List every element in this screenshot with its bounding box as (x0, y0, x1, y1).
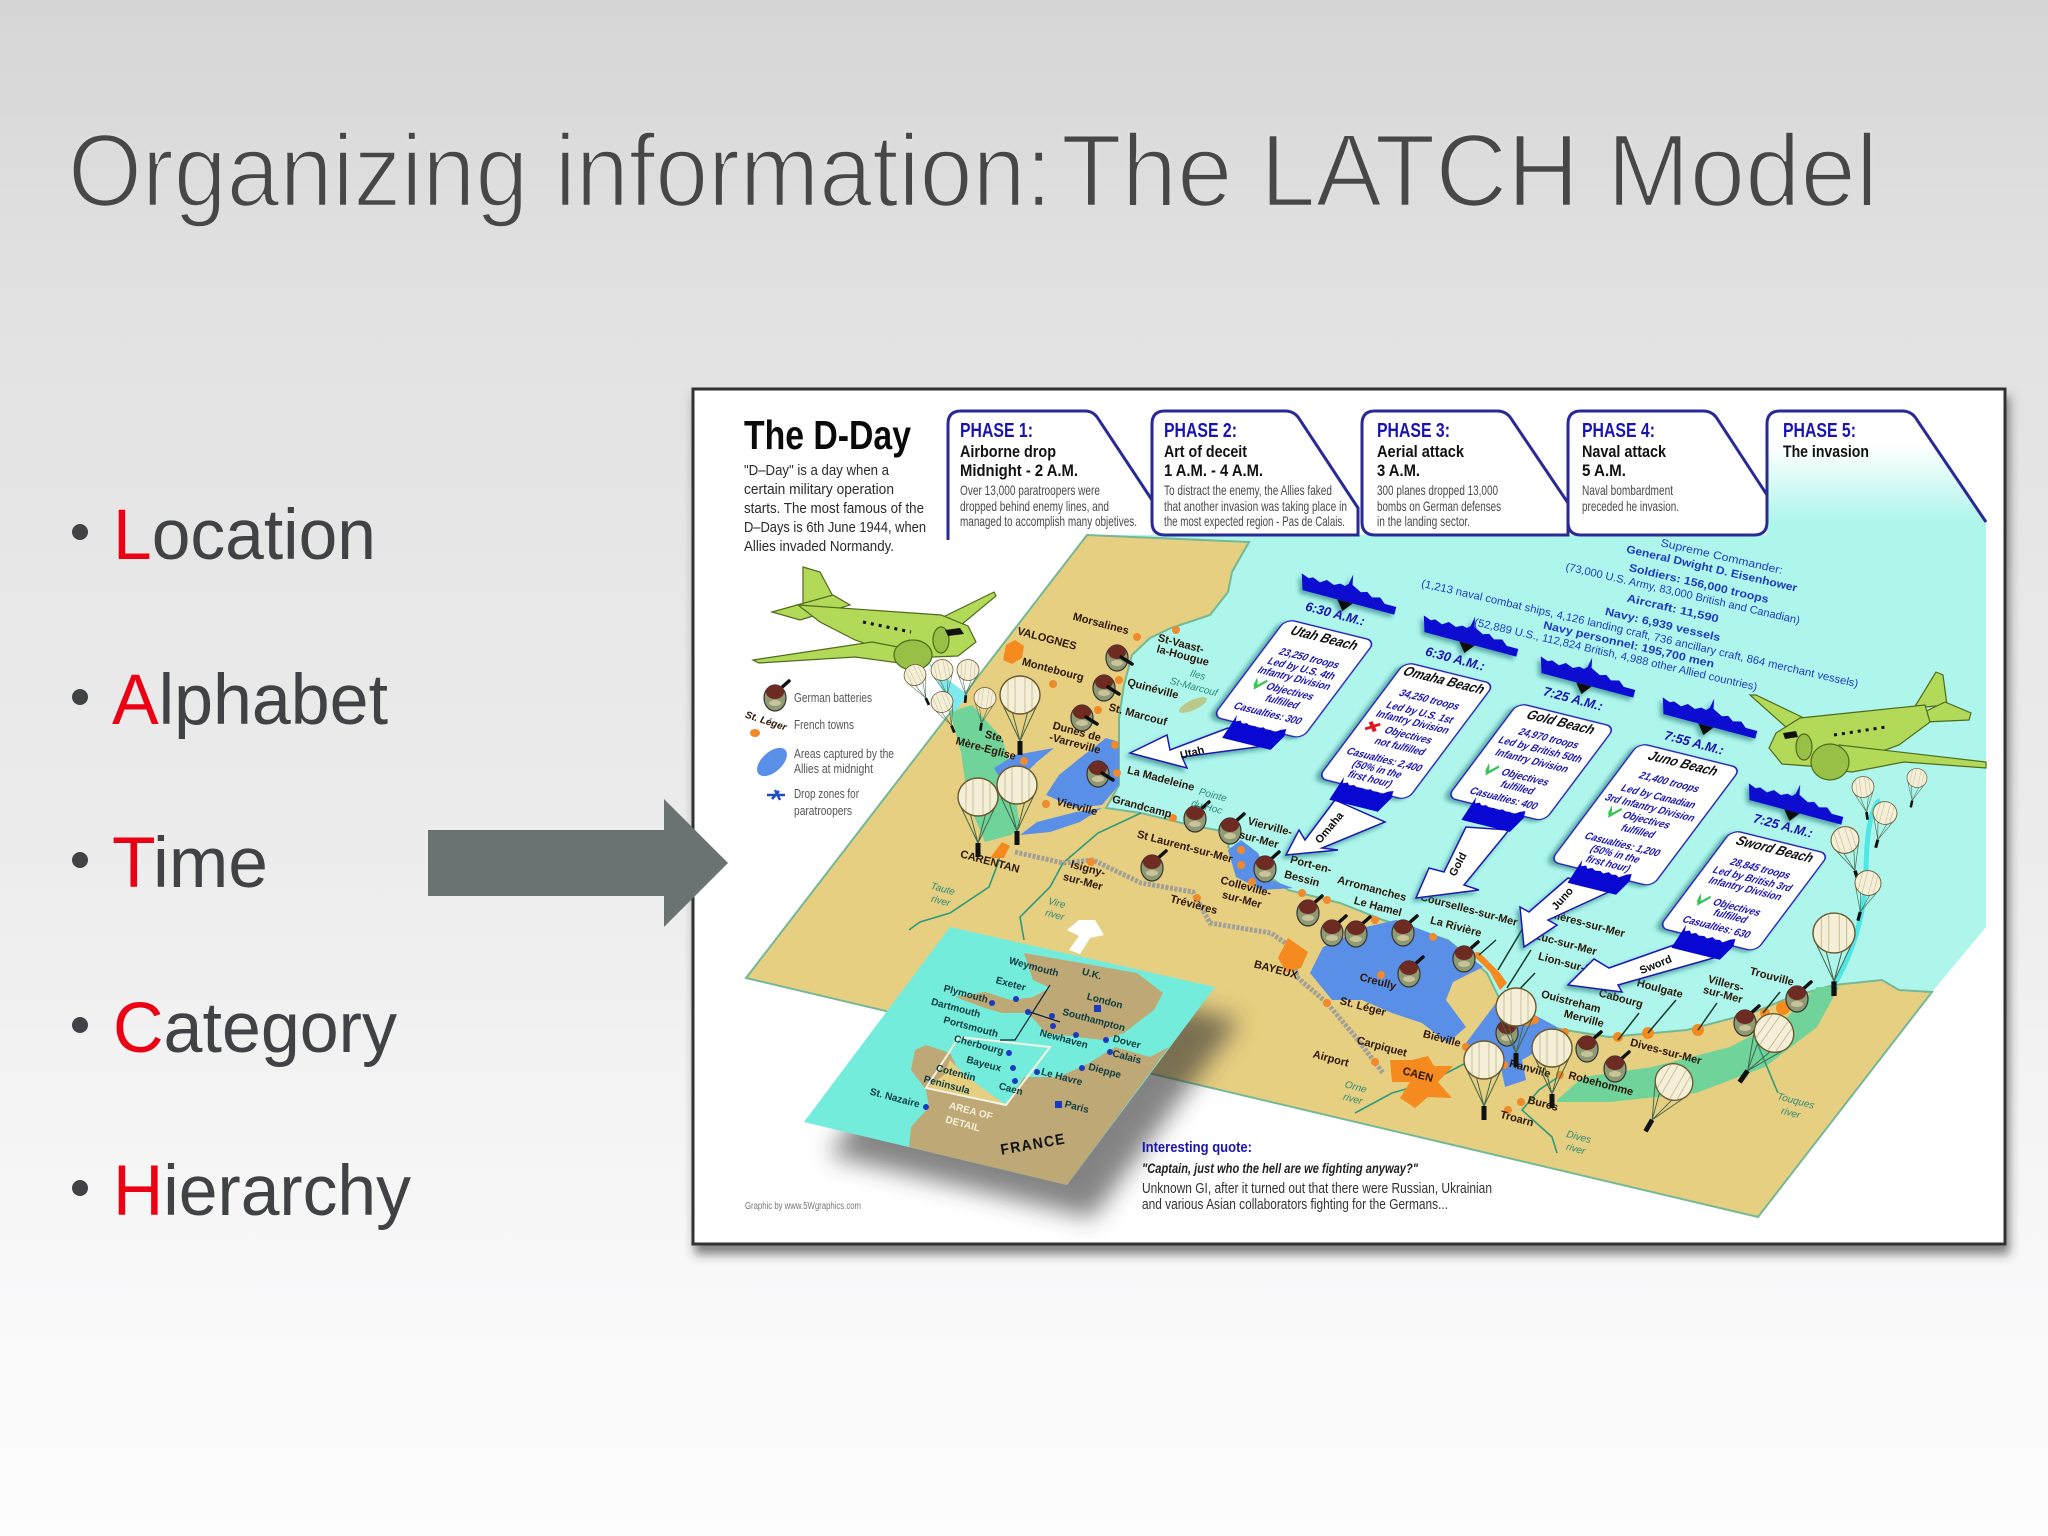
arrow: Sword (1568, 945, 1717, 992)
bullet: Time: Time (112, 824, 268, 903)
bullet: Location: Location (113, 496, 376, 575)
bullet: Hierarchy: Hierarchy (113, 1152, 411, 1231)
map: town labels: Isigny- (1069, 859, 1107, 880)
card: Omaha Beach: 34,250 troops (1396, 687, 1463, 713)
quote block: Interesting quote: (1142, 1139, 1252, 1156)
inset labels: Southampton (1061, 1007, 1126, 1034)
phase tab 1: dropped behind enemy lines, and (960, 498, 1109, 514)
landing time labels: 6:30 A.M.: (1424, 644, 1487, 674)
arrow: Utah: Utah (1179, 744, 1206, 762)
title (68, 113, 1878, 228)
inset UK land (955, 953, 1163, 1040)
map: town markers (1020, 626, 1569, 1114)
phase tab 1 (948, 411, 1152, 540)
title: The LATCH Model (1061, 113, 1878, 228)
map: sea (746, 411, 1986, 1217)
phase tab 1: PHASE 1: (960, 420, 1033, 442)
intro text (744, 462, 926, 555)
legend: drop zones: Drop zones for (794, 786, 860, 801)
bullet list: LATCH (72, 496, 411, 1231)
phase tab 3: 300 planes dropped 13,000 (1377, 482, 1498, 498)
card: Sword Beach (1648, 830, 1829, 966)
forces summary text: Aircraft: 11,590 (1626, 593, 1720, 625)
map: town labels: Creully (1358, 971, 1398, 993)
map: German batteries (1071, 645, 1811, 1082)
map: town labels: Bessin (1283, 869, 1321, 890)
card: Utah Beach: 23,250 troops (1276, 646, 1343, 671)
icon: transport plane right (1750, 672, 1986, 780)
map: town labels: -Varreville (1048, 732, 1102, 757)
inset labels: London (1086, 992, 1124, 1012)
phase tab 5 (1767, 411, 1986, 522)
map: town labels: Merville (1562, 1008, 1605, 1030)
inset France land (909, 1045, 1169, 1185)
map: town labels: Montebourg (1021, 656, 1085, 684)
map: town labels: Trévières (1169, 893, 1219, 917)
inset labels: Portsmouth (942, 1015, 999, 1040)
map: rivers (909, 813, 1778, 1153)
legend: captured areas: Areas captured by the (794, 746, 894, 761)
card: Omaha Beach: Casualties: 2,400 (1343, 746, 1426, 774)
inset area of detail (926, 1037, 1050, 1105)
inset labels: AREA OF (948, 1100, 994, 1123)
warships (1295, 562, 1848, 834)
inset labels: U.K. (1081, 967, 1103, 983)
card: Utah Beach: Objectives (1263, 681, 1317, 703)
map: town labels: Villers- (1707, 974, 1745, 995)
map: river and sea labels: Vire (1047, 896, 1067, 911)
phase tab 3: PHASE 3: (1377, 420, 1450, 442)
inset labels: Dover (1112, 1034, 1142, 1052)
phase tab 3: in the landing sector. (1377, 513, 1470, 529)
card: Juno Beach: Led by Canadian (1618, 783, 1699, 811)
map: town labels: Cabourg (1597, 987, 1644, 1011)
phase tab 3: Aerial attack (1377, 442, 1464, 461)
card: Omaha Beach: (50% in the (1349, 758, 1405, 781)
card: Gold Beach: Objectives (1498, 767, 1552, 789)
map: town labels: sur-Mer (1062, 871, 1105, 893)
card: Omaha Beach: not fulfilled (1371, 735, 1429, 758)
phase tab 3: bombs on German defenses (1377, 498, 1501, 514)
map: town labels: St. Marcouf (1107, 702, 1169, 729)
inset labels: DETAIL (944, 1115, 981, 1134)
map: town labels: Ranville (1508, 1058, 1552, 1080)
card: Sword Beach: Sword Beach (1732, 833, 1818, 865)
inset labels: FRANCE (999, 1130, 1067, 1159)
arrow: Juno (1520, 878, 1613, 947)
card: Sword Beach: Led by British 3rd (1710, 865, 1795, 894)
intro text: certain military operation (744, 481, 894, 498)
inset sea (804, 927, 1215, 1185)
map: town labels: Colleville- (1219, 875, 1273, 900)
legend (744, 681, 894, 818)
map: river and sea labels: river (1565, 1142, 1587, 1158)
map: leader lines (1479, 923, 1780, 1040)
arrow: list to infographic (428, 799, 728, 927)
phase tab 1: managed to accomplish many objetives. (960, 513, 1137, 529)
map: river and sea labels: river (1044, 908, 1066, 924)
map: town labels: Ouistreham (1540, 988, 1602, 1016)
phase tab 1: Over 13,000 paratroopers were (960, 482, 1100, 498)
forces summary text: (1,213 naval combat ships, 4,126 landing craft, 736 ancillary craft, 864 merchant vessels) (1420, 578, 1859, 690)
inset labels: Plymouth (942, 983, 989, 1006)
inset labels: Dartmouth (930, 997, 981, 1020)
map: river and sea labels (929, 668, 1815, 1158)
title: Organizing information: (68, 113, 1052, 228)
map: town labels: Ste. (983, 729, 1006, 746)
intro text: Allies invaded Normandy. (744, 538, 894, 555)
inset ferry routes (1000, 985, 1060, 1040)
map: town labels: Trouville (1748, 965, 1795, 989)
landing time labels: 7:25 A.M.: (1542, 684, 1605, 714)
map: town labels: Mère-Eglise (954, 735, 1017, 763)
card: Omaha Beach: Infantry Division (1373, 708, 1452, 737)
legend: drop zones (767, 786, 860, 818)
inset labels: Calais (1111, 1048, 1143, 1067)
map: town labels: Quinéville (1126, 677, 1180, 702)
arrow: Utah (1130, 728, 1272, 768)
phase tab 2: Art of deceit (1164, 442, 1247, 461)
intro text: starts. The most famous of the (744, 500, 924, 517)
legend: French towns (744, 710, 854, 737)
card: Juno Beach: Casualties: 1,200 (1581, 830, 1664, 859)
map: town labels: Dunes de (1051, 720, 1102, 744)
map: town labels: Troarn (1499, 1109, 1535, 1129)
card: Sword Beach: fulfilled (1710, 907, 1750, 926)
phase tab 4: PHASE 4: (1582, 420, 1655, 442)
map: town labels: La Rivière (1429, 915, 1483, 940)
inset labels: St. Nazaire (869, 1087, 921, 1111)
map: Iles St-Marcouf (1177, 694, 1209, 716)
map: town labels: St-Vaast- (1156, 632, 1205, 656)
phase tab 3: 3 A.M. (1377, 461, 1420, 480)
arrow: Omaha (1286, 800, 1385, 855)
card: Omaha Beach: first hour) (1344, 769, 1395, 790)
map: town labels: St. Léger (1338, 995, 1388, 1019)
map: flight path streaks (928, 662, 1880, 982)
arrow: Gold (1416, 827, 1509, 898)
phase tab 2: To distract the enemy, the Allies faked (1164, 482, 1332, 498)
phase tab 4: preceded he invasion. (1582, 498, 1679, 514)
map: town labels: Courselles-sur-Mer (1419, 891, 1519, 929)
phase tab 2: 1 A.M. - 4 A.M. (1164, 461, 1263, 480)
legend: drop zones: paratroopers (794, 803, 852, 818)
arrow: inset to map (1067, 920, 1104, 954)
inset labels: Peninsula (922, 1074, 971, 1097)
card: Utah Beach: Utah Beach (1287, 623, 1362, 653)
map: town labels: la-Hougue (1155, 643, 1210, 669)
inset labels: Bayeux (965, 1055, 1003, 1075)
card: Utah Beach: Led by U.S. 4th (1264, 656, 1338, 682)
card: Juno Beach: (50% in the (1587, 843, 1643, 866)
card: Utah Beach: Casualties: 300 (1231, 700, 1305, 727)
quote block: Unknown GI, after it turned out that there were Russian, Ukrainian (1142, 1181, 1492, 1197)
card: Juno Beach (1539, 743, 1741, 901)
map: town labels: Biéville (1422, 1028, 1462, 1050)
card: Omaha Beach (1306, 662, 1494, 816)
map: town labels: Bures (1526, 1094, 1559, 1114)
legend: captured areas (752, 743, 894, 781)
map: town labels: sur-Mer (1238, 829, 1281, 851)
legend: French towns: French towns (794, 717, 854, 732)
map: town labels: Luc-sur-Mer (1534, 930, 1599, 958)
map: river and sea labels: Dives (1565, 1129, 1592, 1146)
forces summary text: General Dwight D. Eisenhower (1625, 544, 1799, 595)
forces summary text: Navy personnel: 195,700 men (1542, 620, 1716, 671)
forces summary text (1420, 537, 1859, 694)
map: river and sea labels: St-Marcouf (1169, 676, 1220, 700)
map: river and sea labels: river (1342, 1092, 1364, 1108)
inset labels: Exeter (994, 975, 1027, 994)
phase tab 4: Naval bombardment (1582, 482, 1673, 498)
card: Utah Beach (1201, 619, 1375, 755)
phase tab 3 (1362, 411, 1568, 535)
map: river and sea labels: du Hoc (1190, 798, 1223, 817)
phase tab 2: the most expected region - Pas de Calais. (1164, 513, 1345, 529)
map: land (746, 535, 1932, 1217)
landing time labels: 7:25 A.M.: (1752, 811, 1815, 841)
quote block (1142, 1139, 1492, 1213)
inset labels (869, 956, 1143, 1159)
card: Gold Beach: Gold Beach (1523, 708, 1599, 737)
card: Juno Beach: 3rd Infantry Division (1602, 792, 1698, 824)
card: Juno Beach: first hour) (1583, 853, 1634, 875)
map: town labels: Carpiquet (1355, 1035, 1408, 1060)
legend: captured areas: Allies at midnight (794, 761, 873, 776)
map: river and sea labels: Touques (1776, 1091, 1815, 1112)
map: town labels: Le Hamel (1353, 895, 1403, 919)
map: town labels: Bernières-sur-Mer (1531, 904, 1627, 940)
card: Gold Beach (1435, 703, 1615, 837)
map: town labels: Morsalines (1071, 611, 1130, 637)
map: town labels: Robehomme (1567, 1070, 1635, 1099)
inset labels: Le Havre (1040, 1067, 1084, 1088)
quote block: and various Asian collaborators fighting for the Germans... (1142, 1197, 1448, 1213)
inset map: UK and France (804, 920, 1240, 1218)
map: river and sea labels: river (1780, 1106, 1802, 1122)
inset labels: Dieppe (1087, 1062, 1123, 1081)
landing time labels (1304, 599, 1815, 841)
phase tab 5: The invasion (1783, 442, 1869, 461)
card: Juno Beach: Juno Beach (1645, 749, 1722, 778)
forces summary text: Navy: 6,939 vessels (1604, 606, 1722, 644)
inset labels: Cotentin (935, 1063, 977, 1084)
map: town labels: sur-Mer (1221, 889, 1264, 911)
beach landing arrows (1130, 728, 1717, 992)
inset labels: Cherbourg (953, 1034, 1005, 1058)
map: town labels: St Laurent-sur-Mer (1136, 829, 1235, 866)
map: town labels: CARENTAN (959, 848, 1021, 876)
card: Juno Beach: fulfilled (1618, 822, 1658, 841)
map: river and sea labels: Taute (929, 881, 956, 898)
map: town labels (954, 611, 1795, 1129)
map: river and sea labels: Orne (1343, 1079, 1368, 1096)
phase tab 5: PHASE 5: (1783, 420, 1856, 442)
map: town labels: Dives-sur-Mer (1629, 1037, 1703, 1068)
forces summary text: (52,889 U.S., 112,824 British, 4,988 other Allied countries) (1473, 617, 1758, 694)
bullet: Alphabet: Alphabet (112, 661, 388, 740)
landing time labels: 7:55 A.M.: (1663, 728, 1726, 758)
inset labels: Weymouth (1008, 956, 1060, 979)
arrow: Sword: Sword (1638, 953, 1674, 977)
graphic credit: Graphic by www.5Wgraphics.com (745, 1201, 861, 1212)
card: Utah Beach: fulfilled (1262, 693, 1302, 711)
inset labels: Paris (1063, 1099, 1090, 1116)
inset labels: Newhaven (1038, 1028, 1089, 1051)
forces summary text: Soldiers: 156,000 troops (1628, 562, 1770, 606)
map: town labels: Vierville (1055, 796, 1099, 818)
card: Sword Beach: Infantry Division (1706, 875, 1785, 903)
map: town labels: BAYEUX (1253, 959, 1300, 982)
map: town labels: Houlgate (1635, 977, 1684, 1001)
map: areas captured by Allies (994, 738, 1557, 1087)
map: drop corridors (950, 705, 1839, 1102)
map: town labels: sur-Mer (1702, 984, 1745, 1006)
card: Juno Beach: 21,400 troops (1636, 770, 1703, 795)
phase tab 2 (1152, 411, 1358, 535)
card: Gold Beach: Casualties: 400 (1466, 785, 1541, 812)
inset shadow (829, 960, 1240, 1218)
map: town labels: Port-en- (1289, 854, 1333, 876)
quote block: "Captain, just who the hell are we fighting anyway?" (1142, 1160, 1418, 1176)
phase tab 4 (1568, 411, 1767, 535)
card: Sword Beach: Casualties: 630 (1679, 914, 1754, 941)
map: town labels: Grandcamp (1111, 793, 1173, 821)
phase tab 2: PHASE 2: (1164, 420, 1237, 442)
D-Day map (746, 411, 1986, 1217)
map: town labels: Airport (1312, 1049, 1350, 1070)
panel: D-Day infographic frame (693, 389, 2005, 1244)
intro text: D–Days is 6th June 1944, when (744, 519, 926, 536)
phase tab 1: Midnight - 2 A.M. (960, 461, 1078, 480)
phase tab 2: that another invasion was taking place in (1164, 498, 1347, 514)
intro text: "D–Day" is a day when a (744, 462, 890, 479)
card: Gold Beach: fulfilled (1497, 779, 1538, 797)
map: town labels: Arromanches (1336, 874, 1408, 904)
infographic title: The D-Day (744, 412, 911, 458)
forces summary text: (73,000 U.S. Army, 83,000 British and Canadian) (1564, 561, 1801, 627)
paratroopers (901, 657, 1929, 1141)
inset city markers (923, 996, 1113, 1110)
card: Sword Beach: 28,845 troops (1727, 856, 1794, 882)
inset labels: Caen (997, 1081, 1024, 1098)
map: town labels: CAEN (1401, 1065, 1434, 1085)
card: Omaha Beach: Objectives (1381, 725, 1436, 747)
map: river and sea labels: river (930, 894, 952, 910)
map: river and sea labels: Iles (1189, 668, 1207, 683)
map: town labels: Lion-sur-Mer (1537, 951, 1605, 980)
bullet: Category: Category (113, 989, 397, 1068)
arrow: Omaha: Omaha (1313, 809, 1347, 846)
map: town labels: VALOGNES (1016, 625, 1078, 653)
card: Juno Beach: Objectives (1619, 809, 1674, 831)
card: Gold Beach: Led by British 50th (1495, 735, 1585, 765)
icon: transport plane left (753, 567, 996, 670)
legend: German batteries (764, 681, 872, 711)
forces summary text: Supreme Commander: (1659, 537, 1784, 577)
map: main road (1015, 852, 1383, 1073)
map: town labels: La Madeleine (1126, 764, 1196, 794)
map: town areas (990, 640, 1790, 1108)
phase tab 1: Airborne drop (960, 442, 1056, 461)
phase tab 4: 5 A.M. (1582, 461, 1626, 480)
card: Gold Beach: 24,970 troops (1515, 726, 1582, 751)
map: river and sea labels: Pointe (1198, 787, 1228, 805)
arrow: Juno: Juno (1550, 885, 1576, 913)
legend: German batteries: German batteries (794, 690, 872, 705)
card: Sword Beach: Objectives (1710, 897, 1764, 919)
map: town labels: Vierville- (1246, 815, 1294, 839)
landing time labels: 6:30 A.M.: (1304, 599, 1367, 629)
card: Gold Beach: Infantry Division (1492, 747, 1572, 775)
phase tab 4: Naval attack (1582, 442, 1666, 461)
card: Utah Beach: Infantry Division (1254, 665, 1334, 693)
legend: French towns: St. Léger (744, 710, 789, 734)
arrow: Gold: Gold (1447, 851, 1470, 878)
card: Omaha Beach: Omaha Beach (1399, 664, 1489, 697)
card: Omaha Beach: Led by U.S. 1st (1383, 699, 1457, 726)
